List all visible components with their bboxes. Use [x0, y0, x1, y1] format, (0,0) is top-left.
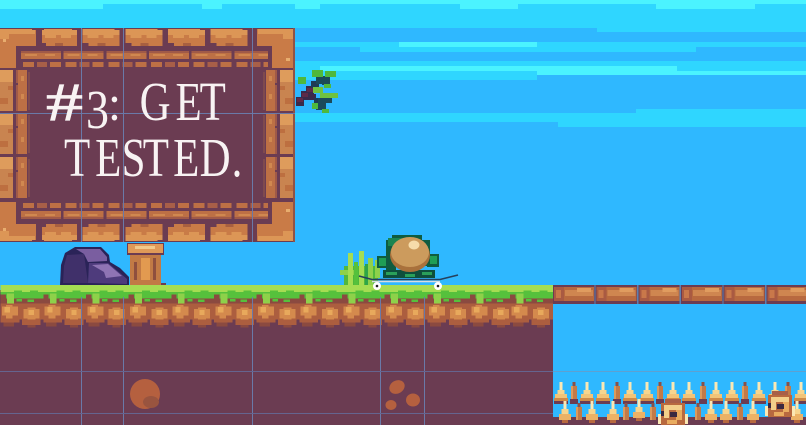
heading text: GET [140, 71, 226, 132]
icon: leafy branch [296, 70, 338, 113]
bottom frame band [0, 200, 295, 242]
wooden bridge [553, 285, 806, 304]
wheel [434, 282, 442, 290]
lower spike row [559, 399, 803, 425]
buried pebbles [386, 377, 420, 410]
spike pit [553, 371, 806, 425]
upper spike row [554, 382, 806, 404]
skull [765, 391, 795, 417]
heading text [46, 71, 242, 188]
skateboard [359, 275, 458, 290]
heading text: TESTED. [64, 127, 242, 188]
wheel [373, 282, 381, 290]
skull [658, 399, 688, 425]
top frame band [0, 28, 295, 70]
buried stone [130, 379, 160, 409]
right frame column [263, 70, 295, 198]
stone pillar [127, 243, 166, 285]
heading text: 3 [86, 79, 109, 140]
heading text: # [46, 72, 83, 132]
icon: purple boulder [60, 247, 129, 285]
grass and dirt strip [1, 285, 553, 328]
heading text: : [108, 75, 121, 131]
turtle shell [390, 237, 430, 272]
ground platform [0, 285, 553, 425]
turtle character [377, 235, 439, 278]
signboard panel [0, 28, 295, 242]
left frame column [0, 70, 30, 198]
grass tuft [340, 251, 380, 285]
